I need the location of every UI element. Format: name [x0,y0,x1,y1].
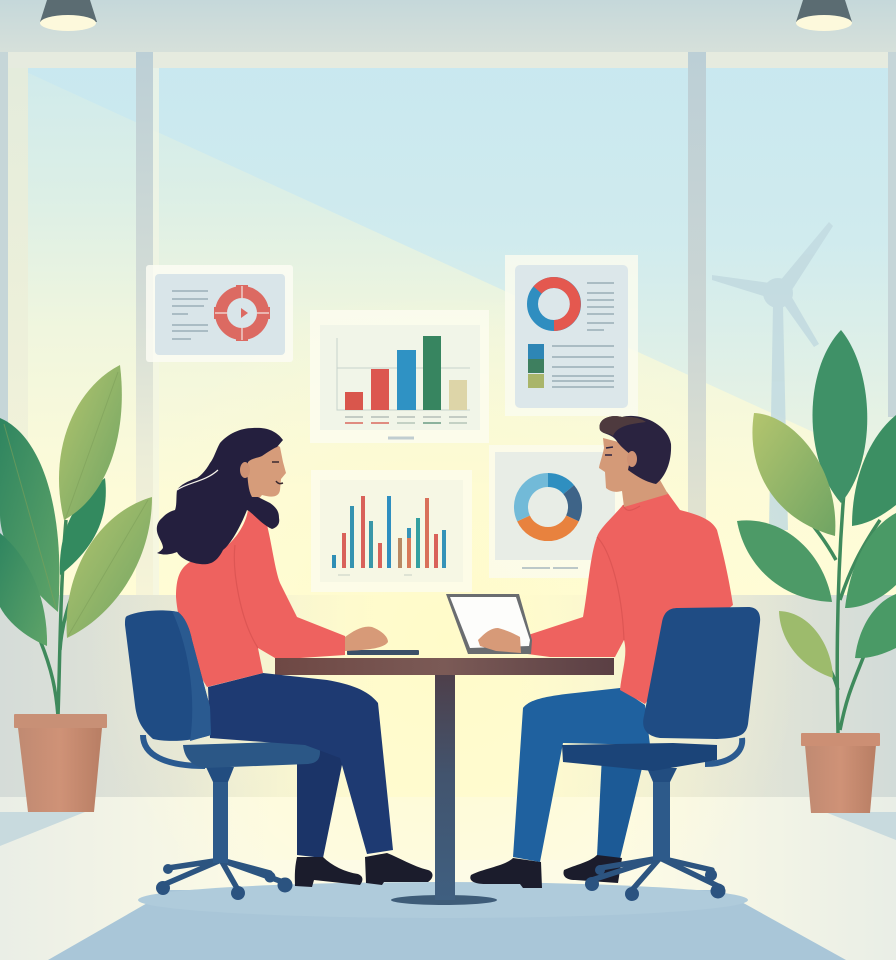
leaf mid left [737,520,832,602]
leaf lower right [855,594,896,658]
ceiling lamp left [40,0,97,31]
chair wheels [156,864,292,900]
leaf upper left [752,413,835,536]
leaf top [812,330,867,503]
chair wheels [585,865,726,901]
woman face [244,443,286,512]
plant: left [0,365,152,812]
man face [599,438,668,507]
woman hair [157,428,283,564]
chair seat [562,743,717,771]
panel: donut report [505,255,638,416]
man back leg [597,755,642,859]
panel: gauge dashboard [146,265,293,362]
floor shadow left [0,812,85,846]
donut chart: four segments [521,480,575,534]
tablet on table [347,650,419,655]
panel: segmented donut [489,445,625,578]
leaf lower left [0,533,47,646]
chair back: woman [125,610,211,741]
panel: bar chart [310,310,489,443]
woman hand [345,627,388,651]
plant: right [737,330,896,813]
chair seat [183,741,320,768]
figure: man [470,416,733,888]
woman front shoe [365,853,432,885]
pot [18,728,102,812]
leaf right [67,497,152,638]
table pedestal [391,674,497,905]
chair back [643,607,760,739]
floor [0,797,896,960]
leaf lower left [779,611,833,678]
man front shoe [470,858,542,888]
leaf dark left [0,418,59,612]
wind turbine [712,222,833,530]
figure: woman [157,428,433,885]
window frame [0,52,896,595]
man trousers [513,688,650,862]
leaf top [59,365,122,520]
panel: thin bars chart [311,470,472,592]
floor shadow right [825,812,896,840]
woman back leg and shoe [295,750,362,887]
pot [805,745,876,813]
man back shoe [563,855,622,883]
leaf upper right [852,415,896,526]
ceiling [0,0,896,52]
chair column [653,768,670,860]
leaf back [60,478,106,575]
man shirt [519,492,733,704]
man hand [478,628,521,653]
man hair [600,416,671,484]
chair column [213,775,228,863]
leaf mid right [845,513,896,608]
man ear [627,451,637,467]
light beam across window [0,60,896,600]
table top [275,658,614,675]
woman shirt [176,510,345,687]
chair base [163,860,283,890]
back wall [0,595,896,798]
chair: woman lower parts [143,735,320,900]
rug ellipse [138,882,748,918]
chair arm [705,738,742,764]
chair arm [143,735,205,766]
woman trousers [208,673,393,854]
icon: gauge ring [214,285,270,341]
donut chart: red and blue [532,282,576,326]
woman ear [240,462,250,478]
center glow [80,300,810,860]
ceiling lamp right [796,0,852,31]
chair: man [562,607,760,901]
laptop [446,594,532,654]
rug [48,890,846,960]
chair base [592,858,722,890]
background: sky through windows [0,0,896,600]
